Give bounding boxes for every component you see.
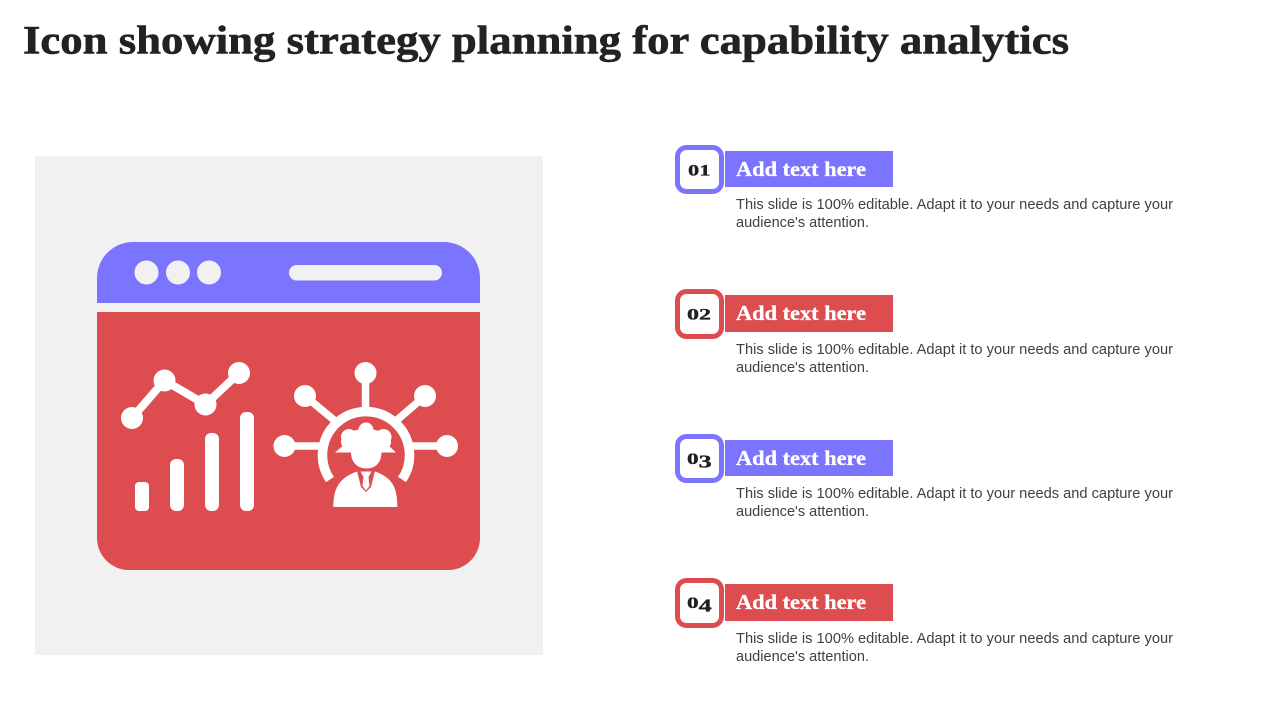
- description 02: [736, 342, 1173, 376]
- address bar: [289, 265, 442, 280]
- heading bar 04: [725, 584, 893, 621]
- number 04: 4: [699, 595, 712, 616]
- icon: person with gear hat: [333, 422, 397, 507]
- number 03: 0: [687, 450, 699, 468]
- heading 04: Add text here: [736, 590, 866, 614]
- torso: [333, 472, 397, 507]
- collar gap: [357, 471, 375, 492]
- icon: browser window: [97, 242, 480, 570]
- number 03: 3: [699, 451, 712, 472]
- heading 03: Add text here: [736, 446, 866, 470]
- window control dots: [134, 260, 221, 284]
- heading 02: Add text here: [736, 301, 866, 325]
- number 02: 02: [687, 306, 711, 323]
- description 02: audience's attention.: [736, 360, 869, 376]
- browser title bar: [97, 242, 480, 303]
- description 02: This slide is 100% editable. Adapt it to your needs and capture your: [736, 342, 1173, 358]
- icon: line chart: [121, 362, 250, 429]
- title: Icon showing strategy planning for capability analytics: [23, 18, 1069, 62]
- description 01: audience's attention.: [736, 215, 869, 231]
- number badge 03: [678, 436, 722, 480]
- number 01: 01: [688, 162, 710, 180]
- heading bar 02: [725, 295, 893, 332]
- number badge 02: [678, 292, 722, 336]
- description 04: audience's attention.: [736, 649, 869, 665]
- browser content area: [97, 312, 480, 570]
- description 03: [736, 486, 1173, 520]
- heading bar 01: [725, 151, 893, 187]
- description 01: This slide is 100% editable. Adapt it to your needs and capture your: [736, 197, 1173, 213]
- list item 03: [678, 436, 1173, 520]
- tie: [360, 472, 372, 490]
- description 03: audience's attention.: [736, 504, 869, 520]
- icon: strategy network: [274, 362, 458, 507]
- list item 04: [678, 580, 1173, 665]
- gear hat: [335, 422, 396, 455]
- network nodes: [274, 362, 458, 457]
- number badge 01: [678, 148, 722, 192]
- icon: bar chart: [135, 412, 254, 511]
- description 04: This slide is 100% editable. Adapt it to your needs and capture your: [736, 631, 1173, 647]
- panel: icon background: [35, 156, 543, 655]
- network spokes: [284, 373, 447, 446]
- heading 01: Add text here: [736, 157, 866, 181]
- head: [351, 452, 382, 468]
- list item 02: [678, 292, 1173, 376]
- heading bar 03: [725, 440, 893, 476]
- list item 01: [678, 148, 1173, 231]
- number badge 04: [678, 580, 722, 626]
- network arc: [323, 412, 410, 480]
- description 04: [736, 631, 1173, 665]
- number 04: 0: [687, 594, 699, 612]
- description 03: This slide is 100% editable. Adapt it to your needs and capture your: [736, 486, 1173, 502]
- description 01: [736, 197, 1173, 231]
